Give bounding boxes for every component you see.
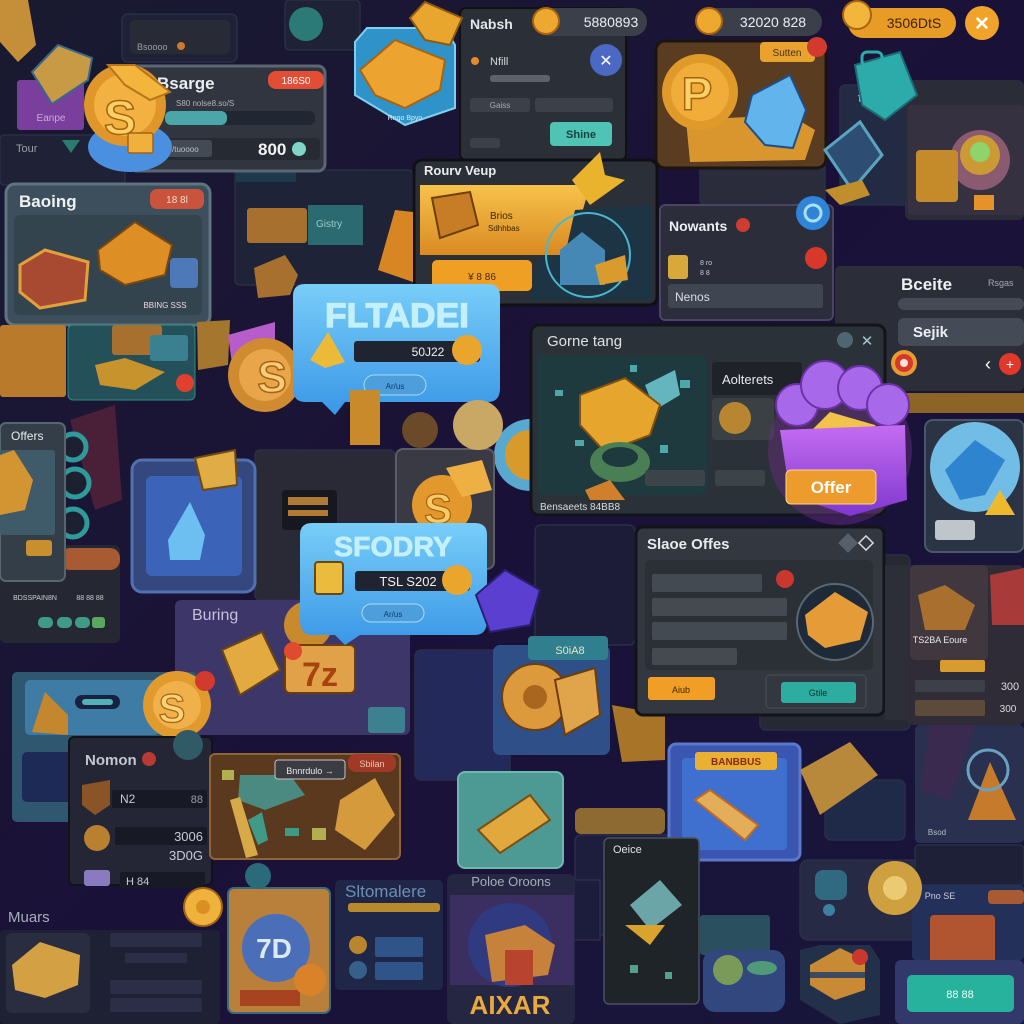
panel: right robot card: ttem [858,90,885,105]
tag [150,189,204,209]
buttons: Aiub [672,685,690,695]
tag [348,754,396,772]
button: Ar/us [384,610,402,619]
icon: orange behind panel [378,210,413,282]
heading: FLTADEI [325,297,469,335]
panel: envelope top left: Eanpe [37,113,66,124]
panel: teal diamond card [458,772,563,868]
icon [315,562,343,594]
panel: Beite: Rsgas [988,278,1014,288]
panel: Gorne tang: Bensaeets 84BB8 [540,502,620,513]
panel: Beite: + [1006,356,1014,372]
panel: right robot card [858,80,1024,220]
button [786,470,876,504]
panel: Gorne tang: ✕ [861,333,873,350]
panel: bottom right shop: Pno SE [925,891,955,901]
panel: Tour row: Tour [16,143,38,155]
heading: Buring [192,607,238,624]
tag [760,42,815,62]
close button: ✕ [599,53,613,70]
panel: right side cards: TS2BA Eoure [913,635,967,645]
coin: S mid left [228,322,302,412]
badge [891,350,917,376]
amount bar [354,335,482,365]
panel: S coin card [282,390,503,569]
panel: Slaoe Offes: Gtile [809,688,827,698]
blue badge [796,196,830,230]
panel: P coin: P [682,68,712,120]
heading: SFODRY [334,531,452,562]
background red shape [70,405,122,510]
tag: Sutten [773,48,801,59]
panel: Nomon: H 84 [126,876,149,888]
side text [712,362,802,395]
icon: gold flower [868,861,922,915]
buttons [648,677,715,700]
value: 800 [258,140,286,159]
tag: 18 8l [166,195,188,206]
panel: Nowants: 8 8 [700,270,710,277]
panel: lower left list: 88 88 88 [76,595,104,602]
icon: close button orange [965,6,999,40]
panel: Baoing [6,184,210,325]
gold box [580,378,660,452]
label [275,760,345,779]
panel: Bsarge [130,66,325,171]
icon [310,332,345,368]
panel: Nowants [660,196,833,320]
button [432,260,532,291]
panel: 7D poster: 7D [256,933,292,964]
value [258,140,306,159]
button [550,122,612,146]
icon: purple gem [476,570,540,632]
panel: Nabsh: Gaiss [490,101,510,110]
panel: lower left list: BDSSPAIN8N [13,595,57,602]
panel: Offers [0,423,89,581]
progress bar [165,111,315,125]
currency pill 3 [843,1,956,38]
currency pill 1 [533,8,647,36]
panel: triangle poster [915,725,1024,843]
panel: Bsing: 7z [302,656,338,694]
heading: Bceite [901,275,952,294]
panel: AIXAR poster [447,874,575,1024]
banner [420,185,590,255]
panel: Gorne tang: Aolterets [722,372,774,387]
panel: Sltomalere [335,880,443,990]
heading: Offers [11,429,43,443]
panel: teal-blue left card: S [159,687,185,731]
currency pill 2 [696,8,822,36]
icon: close button orange: ✕ [974,14,990,35]
panel: brown map [210,754,400,859]
amount bar: TSL S202 [379,574,437,589]
tag: BANBBUS [711,757,761,768]
panel: Nowants: 8 ro [700,260,712,267]
button: Shine [566,129,596,141]
green bowl [590,442,650,482]
input: Sejik [913,324,949,341]
button: 88 88 [946,989,974,1001]
label: Bnnrdulo → [286,766,334,776]
heading: Nomon [85,752,137,769]
panel: Nomon: 3D0G [169,848,203,863]
heading: Nowants [669,218,728,234]
panel: Rourv Veup: Brios [490,211,513,222]
panel: Rourv Veup: Sdhhbas [488,224,520,233]
icon: teal bag [855,52,917,120]
currency pill 2: 32020 828 [740,14,806,30]
panel: FLTADEI [293,284,500,415]
icon: gold block behind [612,705,665,762]
close button [590,44,622,76]
heading: Baoing [19,192,77,211]
heading: Nabsh [470,16,513,32]
panel: Nomon [69,730,212,888]
panel: right side cards: 300 [1000,704,1017,715]
gift box [745,75,806,148]
rows: N2 [120,792,136,806]
panel: Baoing: BBING SSS [143,301,187,310]
circle tabs [59,434,89,537]
button: Offer [811,478,852,497]
amount bar: 50J22 [412,345,445,359]
amount bar [355,565,472,595]
panel: right side cards: 300 [1001,681,1019,693]
icon: gold chest top [410,2,462,45]
rows: 88 [191,794,203,806]
button [362,604,424,622]
icon: stacked boxes [800,945,880,1024]
button: ¥ 8 86 [467,272,496,283]
icon: small gold coin [184,888,222,926]
panel: Beite [835,266,1024,413]
panel: bottom right shop [895,885,1024,1024]
currency pill 1: 5880893 [584,14,638,30]
heading: Rourv Veup [424,163,496,178]
panel: Gorne tang [531,325,885,515]
icon: hex picture [825,122,882,205]
panel: Slaoe Offes [636,527,884,715]
panel: Bsarge: S80 nolse8.so/S [176,99,234,108]
icon: purple gift box [768,361,912,525]
panel: blue crystal square [132,450,255,592]
inner [645,560,873,670]
panel: lower left list [0,545,120,643]
red tag [268,71,324,89]
panel: envelope top left [17,45,92,130]
icon: blue waffle card [355,28,455,125]
heading: Bsarge [157,74,215,93]
icon: blue waffle card: Rngo Bpyo [388,115,422,122]
panel: Nabsh [460,8,626,160]
heading: Gorne tang [547,333,622,350]
panel: gold badge 7 chain [493,636,610,755]
panel: left row below [0,320,230,400]
heading: Sltomalere [345,882,426,901]
panel: Bsarge: /tuoooo [172,145,199,154]
panel: Bsing [175,600,410,735]
button [364,375,426,395]
heading: Poloe Oroons [471,874,551,889]
scene [530,205,652,300]
shards [555,365,690,453]
title: AIXAR [470,990,551,1020]
panel: P coin [656,37,827,168]
panel: 7D poster [228,863,330,1013]
coin: big S top left [84,64,172,172]
red tag: 186S0 [282,76,311,87]
panel: Beite: ‹ [985,354,991,374]
icon: teal ring left of scene [494,419,566,491]
panel: S coin card: S [424,485,452,532]
icon circle [797,584,873,660]
panel: triangle poster: Bsod [928,828,946,837]
panel: Nomon: 3006 [174,829,203,844]
rows [112,790,207,808]
icon: gold diamond right [800,742,878,815]
panel: Nabsh: Nfill [490,56,508,68]
scene [537,355,707,495]
panel: top icon row: Bsoooo [137,42,168,52]
panel: Nowants: Nenos [675,290,710,304]
input [898,318,1024,346]
panel: top icon row [130,7,323,54]
panel: Tour row [16,140,80,155]
button: Ar/us [386,382,404,391]
panel: BANBBUS card [669,744,800,860]
panel: Rourv Veup [414,152,657,305]
panel: blue crystal card [925,420,1024,552]
heading: Oeice [613,844,642,856]
heading: Muars [8,909,50,926]
icon: round speaker [815,870,847,916]
panel: gold badge 7 chain: S0iA8 [555,645,585,657]
icon: round card [700,915,785,1012]
panel: right side cards [885,565,1024,725]
coin: S mid left: S [257,353,287,402]
icon: gold chunk top left [0,0,36,62]
panel: SFODRY [300,523,487,645]
panel: Oeice [604,838,699,1004]
coin: big S top left: S [104,92,136,145]
tag: Sbilan [359,759,385,769]
currency pill 3: 3506DtS [887,15,941,31]
panel: teal-blue left card [12,671,215,822]
panel: Muars [0,909,220,1024]
panel: Gistry behind: Gistry [316,219,342,230]
heading: Slaoe Offes [647,536,730,553]
icon: orange strip [575,808,665,834]
panel: Gistry behind [236,170,363,298]
